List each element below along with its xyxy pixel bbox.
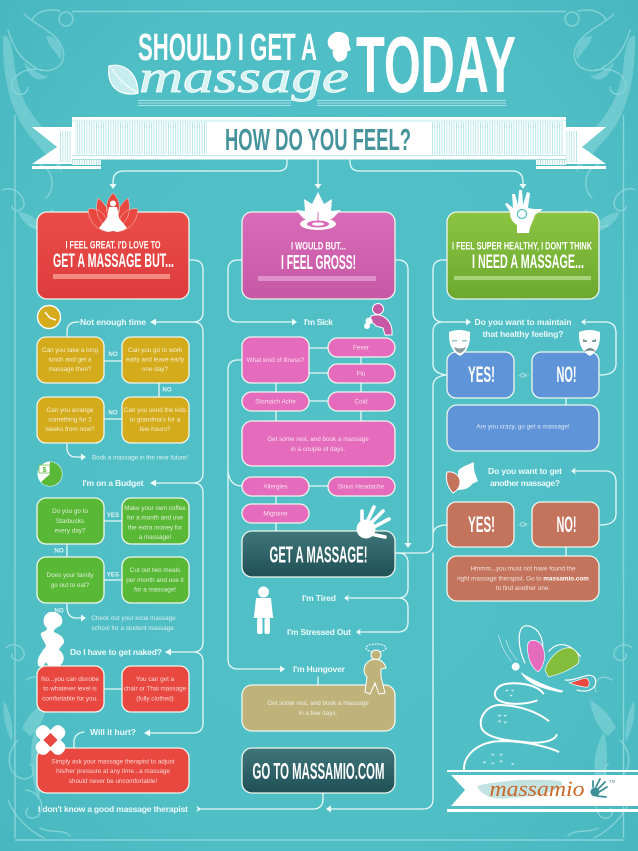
text: are you crazy: Are you crazy, go get a massage! xyxy=(476,424,570,430)
panel: blue no: NO! xyxy=(556,362,576,387)
text: long lunch: Can you take a long xyxy=(42,347,98,354)
banner connectors xyxy=(113,159,523,186)
text: pressure: his/her pressure at any time...a massage xyxy=(56,768,170,775)
labels: no: NO xyxy=(108,351,118,358)
text: cold: Cold xyxy=(355,398,368,406)
logo hand xyxy=(590,779,607,797)
label: I'm sick: I'm Sick xyxy=(304,317,333,327)
heading: I would but: I WOULD BUT... xyxy=(291,240,346,252)
title word: today: TODAY xyxy=(356,20,516,109)
text: hmmm: Hmmm...you must not have found the xyxy=(470,566,576,572)
text: flu: Flu xyxy=(357,370,366,378)
text: hmmm: right massage therapist. Go to massamio.com xyxy=(457,575,589,582)
panel: get a massage xyxy=(242,531,395,577)
text: starbucks: Do you go to xyxy=(52,508,88,515)
panel: blue no xyxy=(532,352,599,398)
icon: clock xyxy=(38,306,60,328)
panel: green question boxes xyxy=(37,498,189,603)
text: work early: Can you go to work xyxy=(128,347,182,354)
title xyxy=(109,20,516,109)
label: or: -Or- xyxy=(518,372,529,380)
right column connectors xyxy=(395,260,468,553)
panel: super healthy header xyxy=(447,212,599,299)
text: chair massage: chair or Thai massage xyxy=(124,686,187,693)
panel: illness boxes xyxy=(242,337,395,523)
text: work early: one day? xyxy=(142,366,168,373)
text: own coffee: for a month and use xyxy=(127,515,183,522)
label: on a budget: I'm on a Budget xyxy=(82,478,144,488)
text: maintain healthy feeling: Do you want to maintain xyxy=(474,317,572,327)
text: starbucks: every day? xyxy=(55,528,86,535)
header bar xyxy=(258,276,376,281)
heading: yes: YES! xyxy=(468,362,495,387)
stacked stones xyxy=(464,683,558,770)
panel: feel gross header xyxy=(242,212,395,299)
label: I'm hungover: I'm Hungover xyxy=(293,664,346,674)
icon: tired person xyxy=(253,586,274,634)
label: yes: YES xyxy=(107,512,119,519)
text: massage school: Check out your local massage xyxy=(91,615,176,622)
heading: feel great: I FEEL GREAT. I'D LOVE TO xyxy=(66,240,161,252)
brush stroke xyxy=(477,780,562,799)
label: no second row: NO xyxy=(108,410,118,416)
label: no from starbucks: NO xyxy=(54,548,64,554)
text: own coffee: the extra money for xyxy=(128,524,182,531)
label: no from family: NO xyxy=(54,608,64,614)
heading: get a massage but: GET A MASSAGE BUT... xyxy=(53,251,174,272)
text: allergies: Allergies xyxy=(263,484,288,490)
label: not enough time: Not enough time xyxy=(80,317,146,327)
text: arrange something: Can you arrange xyxy=(47,407,93,414)
panel: gold question boxes xyxy=(37,337,189,443)
text: book a massage in the near future: Book a massage in the near future! xyxy=(92,454,188,462)
text: send the kids: few hours? xyxy=(140,426,171,433)
heading: how do you feel: HOW DO YOU FEEL? xyxy=(225,122,411,157)
text: family eat out: go out to eat? xyxy=(51,582,90,589)
title underline stripes xyxy=(138,100,506,106)
heading: brown yes: YES! xyxy=(468,512,495,537)
text: no disrobe: to whatever level is xyxy=(43,686,97,693)
bottom-right ribbon with logo xyxy=(447,770,638,812)
title line: should I get a: SHOULD I GET A xyxy=(138,27,317,69)
panel: go to massamio xyxy=(242,748,395,793)
text: chair massage: (fully clothed) xyxy=(136,695,174,702)
text: pressure: should never be uncomfortable! xyxy=(69,778,157,785)
middle column connectors xyxy=(228,260,294,669)
text: cut out meals: for a massage! xyxy=(134,587,176,594)
text: own coffee: a massage! xyxy=(139,534,172,541)
panel: brown yes xyxy=(447,502,514,547)
text: rest few days: Get some rest, and book a massage xyxy=(267,700,369,707)
text: long lunch: massage then? xyxy=(48,366,92,373)
panel: hungover answer xyxy=(242,685,395,731)
text: arrange something: something for 2 xyxy=(48,416,92,424)
panel: get a massage: GET A MASSAGE! xyxy=(270,542,368,568)
text: sinus headache: Sinus Headache xyxy=(338,484,385,490)
text: another massage: Do you want to get xyxy=(488,466,562,476)
text: cut out meals: Cut out two meals xyxy=(130,567,180,574)
header bar xyxy=(454,276,591,280)
text: stomach ache: Stomach Ache xyxy=(255,398,296,406)
ribbon shape xyxy=(447,770,638,812)
icon: bandage cross xyxy=(33,723,68,757)
text: cut out meals: per month and use it xyxy=(126,577,184,584)
text: hmmm: to find another one. xyxy=(496,585,550,592)
text: that healthy feeling: that healthy feeling? xyxy=(482,329,564,339)
icon: sick person xyxy=(364,304,392,335)
text: arrange something: weeks from now? xyxy=(44,426,95,433)
text: fever: Fever xyxy=(353,344,369,352)
arrowheads xyxy=(81,184,586,812)
banner xyxy=(32,117,606,169)
panel: feel great header xyxy=(37,212,189,299)
icon: butterfly and stones logo xyxy=(464,626,596,770)
label: no vertical: NO xyxy=(162,386,172,394)
text: family eat out: Does your family xyxy=(47,572,93,579)
text: migraine: Migraine xyxy=(263,510,288,518)
text: another massage second line: another massage? xyxy=(490,478,560,488)
panel: brown answer xyxy=(447,556,599,601)
text: send the kids: Can you send the kids xyxy=(124,407,186,414)
panel: go to massamio: GO TO MASSAMIO.COM xyxy=(252,758,384,784)
icon: sad mask xyxy=(579,330,600,356)
text: what kind of illness: What kind of illness? xyxy=(247,357,305,364)
text: send the kids: to grandma's for a xyxy=(130,416,181,424)
title word: massage: massage xyxy=(139,51,349,102)
text: work early: early and leave early xyxy=(126,356,185,364)
logo wordmark: massamio xyxy=(490,776,584,801)
text: massage school: school for a student massage. xyxy=(91,625,176,632)
icon: white hand xyxy=(356,507,389,538)
header bar xyxy=(53,274,170,279)
text: pressure: Simply ask your massage therapist to adjust xyxy=(51,758,175,766)
icon: money pie: $ xyxy=(43,467,47,474)
icon: white lotus xyxy=(296,192,341,230)
text: rest couple of days: in a couple of days. xyxy=(291,446,345,453)
panel: blue answer xyxy=(447,405,599,451)
heading: feel gross: I FEEL GROSS! xyxy=(281,252,356,274)
left column connectors xyxy=(147,260,203,733)
label: yes second row: YES xyxy=(107,572,119,578)
icon: woman head silhouette xyxy=(328,32,351,62)
label: therapist: I don't know a good massage therapist xyxy=(38,804,188,814)
connectors xyxy=(67,159,616,812)
butterfly wings xyxy=(498,626,596,693)
label: brown or: -Or- xyxy=(518,522,529,528)
text: rest couple of days: Get some rest, and book a massage xyxy=(267,436,369,443)
text: long lunch: lunch and get a xyxy=(48,356,92,364)
label: will it hurt: Will it hurt? xyxy=(90,727,136,737)
label: I'm tired: I'm Tired xyxy=(302,593,336,603)
text: no disrobe: No...you can disrobe xyxy=(41,676,99,683)
icon: happy mask xyxy=(449,330,470,356)
text: starbucks: Starbucks xyxy=(56,518,84,525)
icon: hungover person xyxy=(364,644,386,694)
text: chair massage: You can get a xyxy=(136,676,174,683)
icon: hand with eye xyxy=(505,190,543,233)
panel: brown no xyxy=(532,502,599,547)
label: I'm stressed out: I'm Stressed Out xyxy=(287,627,351,637)
trademark: TM xyxy=(609,779,615,784)
text: rest few days: in a few days. xyxy=(299,710,337,717)
text: own coffee: Make your own coffee xyxy=(124,505,186,512)
text: no disrobe: comfortable for you. xyxy=(42,695,98,702)
icon: lotus with meditating figure xyxy=(88,193,138,232)
icon: nude silhouette xyxy=(38,612,64,668)
icon: money pie xyxy=(38,462,62,486)
panel: brown no: NO! xyxy=(556,512,576,537)
panel: pressure answer xyxy=(37,748,189,793)
panel: red answer boxes xyxy=(37,666,189,712)
label: do I have to get naked: Do I have to get naked? xyxy=(70,647,162,657)
ribbon tails xyxy=(32,127,606,164)
icon: leaf xyxy=(109,65,138,94)
ribbon body xyxy=(72,117,566,160)
panel: blue yes xyxy=(447,352,514,398)
icon: leaves xyxy=(446,462,478,493)
